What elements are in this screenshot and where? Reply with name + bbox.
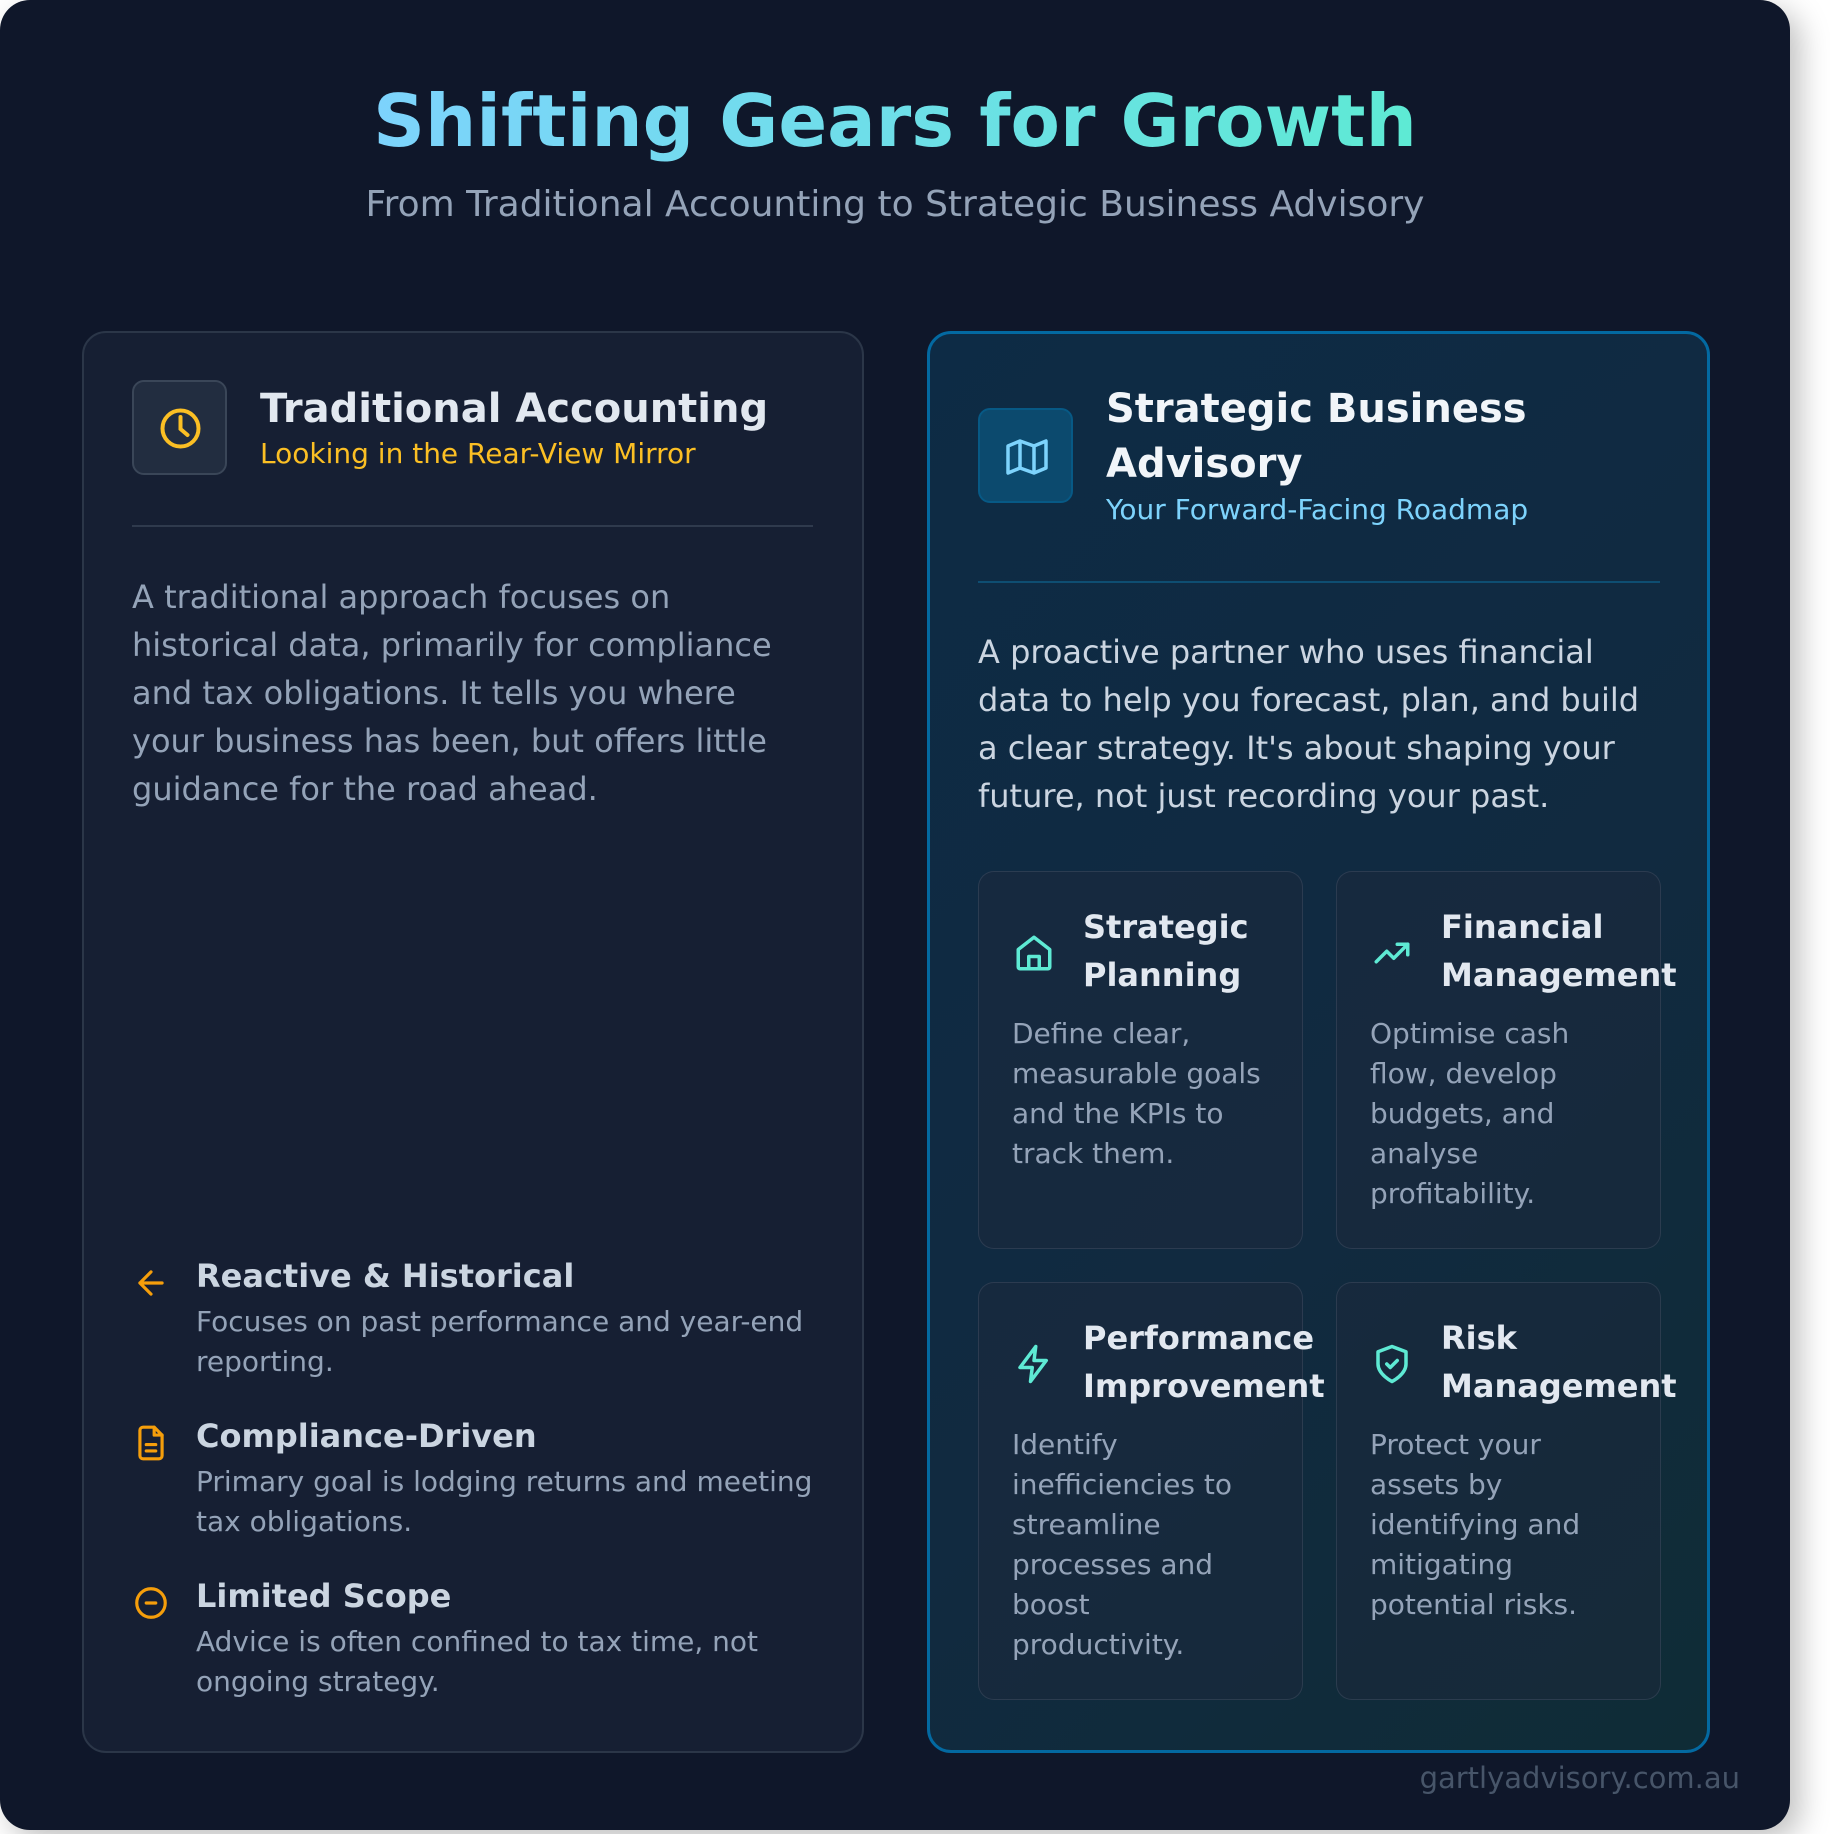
- feature card: performance improvement: productivity.: [1012, 1628, 1184, 1661]
- feature card: financial management: profitability.: [1370, 1177, 1535, 1210]
- feature card: risk management: [1336, 1282, 1661, 1700]
- text: description: historical data, primarily for compliance: [132, 626, 772, 664]
- feature card: strategic planning: Planning: [1083, 956, 1241, 994]
- feature card: financial management: flow, develop: [1370, 1057, 1557, 1090]
- feature card: performance improvement: Performance: [1083, 1319, 1314, 1357]
- feature card: strategic planning: track them.: [1012, 1137, 1174, 1170]
- text: description: guidance for the road ahead.: [132, 770, 598, 808]
- list: compliance: Compliance-Driven: [196, 1417, 537, 1455]
- icon: lightning: [1018, 1344, 1048, 1384]
- feature card: financial management: Financial: [1441, 908, 1603, 946]
- text: description: a clear strategy. It's about shaping your: [978, 729, 1615, 767]
- icon: clock: [132, 380, 227, 475]
- heading: Strategic Business: [1106, 386, 1527, 432]
- feature card: performance improvement: boost: [1012, 1588, 1090, 1621]
- text: description: A traditional approach focuses on: [132, 578, 670, 616]
- icon: file: [138, 1426, 164, 1460]
- subheading: Looking in the Rear-View Mirror: [260, 437, 696, 470]
- feature card: risk management: Protect your: [1370, 1428, 1541, 1461]
- icon: map: [978, 408, 1073, 503]
- list: reactive: Reactive & Historical: [196, 1257, 574, 1295]
- footer: gartlyadvisory.com.au: [1420, 1761, 1740, 1795]
- list: reactive: Focuses on past performance and year-end: [196, 1305, 803, 1338]
- list: reactive: [138, 1257, 803, 1378]
- icon: minus circle: [135, 1587, 167, 1619]
- feature card: performance improvement: Improvement: [1083, 1367, 1325, 1405]
- text: description: A proactive partner who uses financial: [978, 633, 1594, 671]
- feature card: financial management: Management: [1441, 956, 1677, 994]
- text: description: [132, 578, 772, 808]
- heading: Advisory: [1106, 441, 1302, 487]
- text: description: and tax obligations. It tells you where: [132, 674, 736, 712]
- feature card: risk management: potential risks.: [1370, 1588, 1577, 1621]
- feature card: risk management: mitigating: [1370, 1548, 1513, 1581]
- icon: shield check: [1376, 1344, 1408, 1384]
- feature card: risk management: assets by: [1370, 1468, 1502, 1501]
- text: description: future, not just recording your past.: [978, 777, 1549, 815]
- feature card: performance improvement: inefficiencies to: [1012, 1468, 1232, 1501]
- list: compliance: [138, 1417, 812, 1538]
- heading: Traditional Accounting: [260, 386, 768, 432]
- feature card: risk management: Risk: [1441, 1319, 1517, 1357]
- subheading: Your Forward-Facing Roadmap: [1106, 493, 1528, 526]
- text: description: your business has been, but offers little: [132, 722, 767, 760]
- feature card: performance improvement: Identify: [1012, 1428, 1118, 1461]
- feature card: performance improvement: processes and: [1012, 1548, 1213, 1581]
- feature card: risk management: Management: [1441, 1367, 1677, 1405]
- heading: [1106, 386, 1527, 487]
- feature card: strategic planning: Strategic: [1083, 908, 1249, 946]
- text: description: data to help you forecast, plan, and build: [978, 681, 1639, 719]
- feature card: performance improvement: streamline: [1012, 1508, 1161, 1541]
- list: compliance: tax obligations.: [196, 1505, 412, 1538]
- feature card: risk management: identifying and: [1370, 1508, 1580, 1541]
- feature card: strategic planning: and the KPIs to: [1012, 1097, 1224, 1130]
- title: Shifting Gears for Growth: [373, 79, 1417, 163]
- list: limited scope: ongoing strategy.: [196, 1665, 440, 1698]
- icon: arrow left: [138, 1270, 164, 1296]
- feature card: strategic planning: Define clear,: [1012, 1017, 1190, 1050]
- panel: strategic advisory: [927, 331, 1710, 1753]
- list: limited scope: Advice is often confined to tax time, not: [196, 1625, 758, 1658]
- icon: house: [1016, 936, 1052, 970]
- icon: trending up: [1374, 942, 1410, 964]
- feature card: financial management: analyse: [1370, 1137, 1478, 1170]
- feature card: financial management: [1336, 871, 1661, 1249]
- text: description: [978, 633, 1639, 815]
- list: limited scope: [135, 1577, 758, 1698]
- feature card: strategic planning: measurable goals: [1012, 1057, 1261, 1090]
- feature card: financial management: Optimise cash: [1370, 1017, 1569, 1050]
- feature card: performance improvement: [978, 1282, 1303, 1700]
- panel: traditional accounting: [82, 331, 864, 1753]
- feature card: strategic planning: [978, 871, 1303, 1249]
- subtitle: From Traditional Accounting to Strategic Business Advisory: [366, 184, 1424, 225]
- list: limited scope: Limited Scope: [196, 1577, 451, 1615]
- list: compliance: Primary goal is lodging returns and meeting: [196, 1465, 812, 1498]
- list: reactive: reporting.: [196, 1345, 334, 1378]
- feature card: financial management: budgets, and: [1370, 1097, 1554, 1130]
